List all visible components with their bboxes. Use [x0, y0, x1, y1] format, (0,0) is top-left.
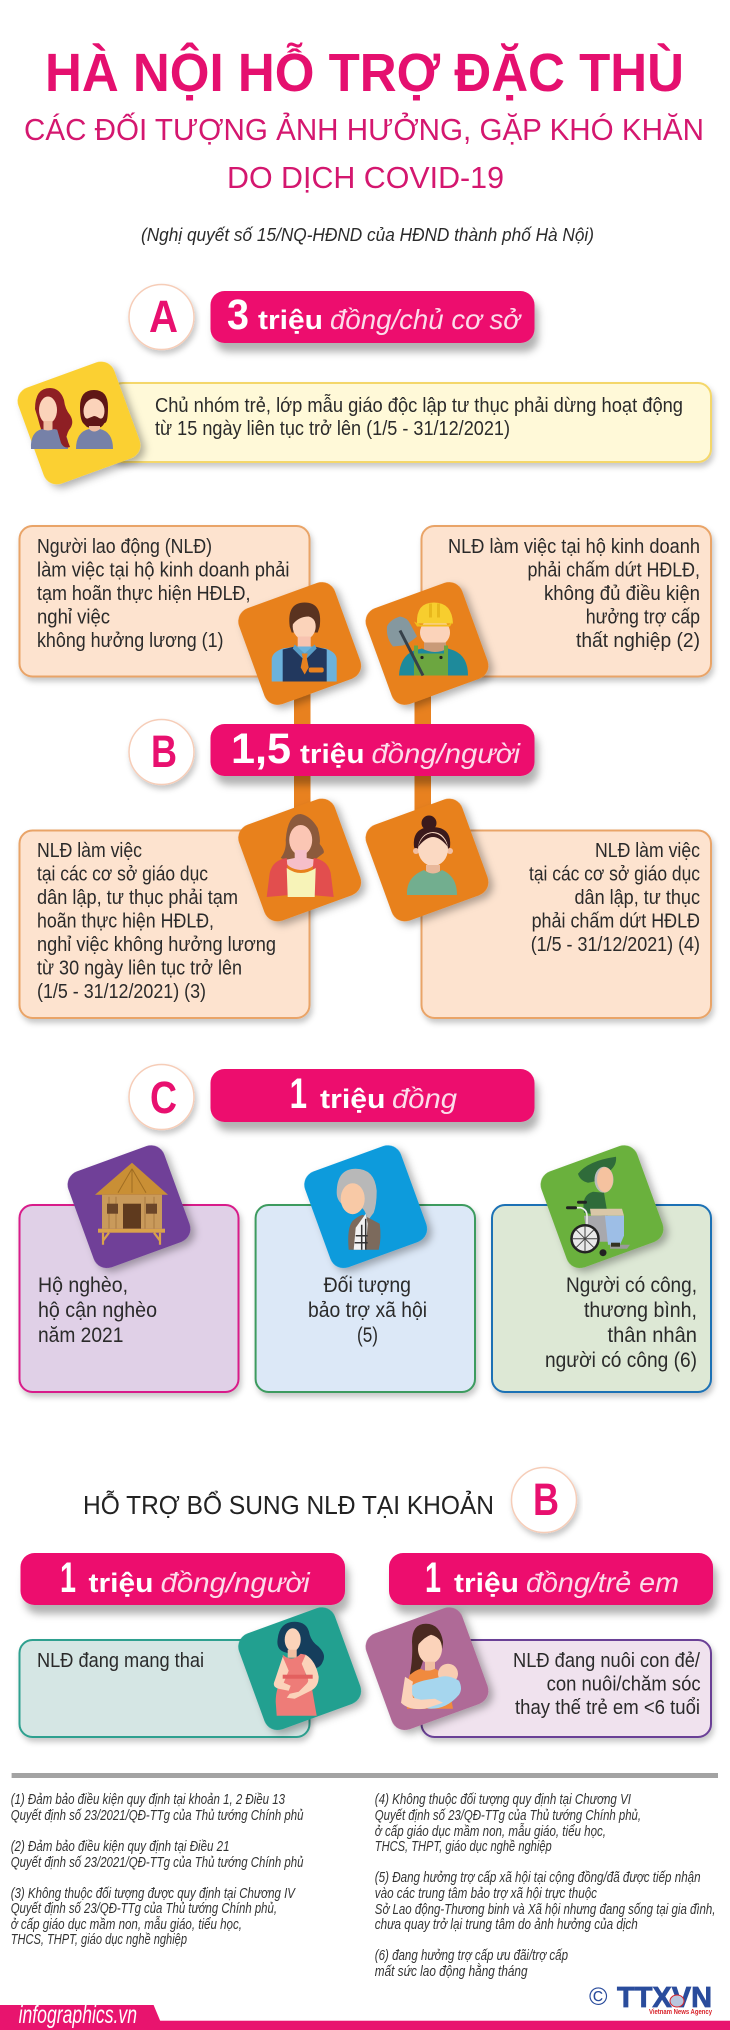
parents text: [513, 1650, 701, 1719]
badge B: [129, 720, 194, 784]
C2 text: bảo trợ xã hội: [308, 1299, 427, 1322]
footnotes left column: Quyết định số 23/QĐ-TTg của Thủ tướng Chính phủ,: [11, 1901, 277, 1917]
panel: B card 4: [422, 830, 711, 1018]
C3 text: Người có công,: [566, 1274, 697, 1297]
icon: couple: [14, 358, 144, 488]
panel: C card merit persons: [492, 1141, 711, 1392]
footnotes left column: ở cấp giáo dục mầm non, mẫu giáo, tiểu học,: [11, 1916, 242, 1933]
card 2 text: phải chấm dứt HĐLĐ,: [528, 560, 700, 582]
title line 2: CÁC ĐỐI TƯỢNG ẢNH HƯỞNG, GẶP KHÓ KHĂN: [24, 111, 704, 147]
C2 text: (5): [357, 1324, 378, 1347]
C3 text: [545, 1274, 697, 1372]
badge A: A: [149, 291, 178, 342]
card 3 text: nghỉ việc không hưởng lương: [37, 934, 276, 956]
title line 3: DO DỊCH COVID-19: [227, 160, 504, 195]
footnotes left column: (1) Đảm bảo điều kiện quy định tại khoản 1, 2 Điều 13: [11, 1792, 285, 1808]
amount pill B: [210, 724, 534, 776]
amount pill A: 3: [227, 291, 249, 339]
card 4 text: dân lập, tư thục: [574, 887, 700, 909]
card 4 text: (1/5 - 31/12/2021) (4): [531, 934, 700, 956]
card 3 text: tại các cơ sở giáo dục: [37, 864, 208, 886]
pregnant text: NLĐ đang mang thai: [37, 1650, 204, 1672]
badge B: B: [151, 726, 177, 777]
footnotes right column: (4) Không thuộc đối tượng quy định tại Chương VI: [375, 1792, 631, 1808]
icon: woman with bun: [362, 795, 492, 925]
amount pill: per child: đồng/trẻ em: [526, 1567, 679, 1598]
section C header: [129, 1064, 534, 1130]
panel: B card 1: [20, 526, 310, 676]
panel: C card poor households: [20, 1141, 238, 1392]
source note: (Nghị quyết số 15/NQ-HĐND của HĐND thành phố Hà Nội): [141, 225, 594, 245]
footnotes right column: THCS, THPT, giáo dục nghề nghiệp: [375, 1839, 552, 1855]
card 2 text: hưởng trợ cấp: [586, 606, 700, 628]
logo: TTXVN: ©: [589, 1983, 608, 2011]
amount pill: per person: đồng/người: [161, 1567, 310, 1598]
card 1 text: làm việc tại hộ kinh doanh phải: [37, 560, 290, 582]
badge C: C: [150, 1072, 177, 1123]
logo: TTXVN: Vietnam News Agency: [649, 2009, 712, 2016]
footer site name: infographics.vn: [19, 2001, 137, 2029]
footnotes left column: (3) Không thuộc đối tượng được quy định tại Chương IV: [11, 1886, 296, 1902]
card 1 text: tạm hoãn thực hiện HĐLĐ,: [37, 583, 250, 605]
parents text: con nuôi/chăm sóc: [547, 1674, 701, 1696]
divider rule: [12, 1773, 718, 1778]
A text: từ 15 ngày liên tục trở lên (1/5 - 31/12/2021): [155, 418, 510, 440]
heading text: HỖ TRỢ BỔ SUNG NLĐ TẠI KHOẢN: [83, 1490, 494, 1520]
C2 text: Đối tượng: [324, 1274, 411, 1297]
footnotes left column: Quyết định số 23/2021/QĐ-TTg của Thủ tướng Chính phủ: [11, 1855, 303, 1871]
footer bar: [0, 2001, 730, 2030]
icon: mother and baby: [362, 1603, 492, 1734]
section: extra support heading: [83, 1468, 576, 1532]
C1 text: [38, 1274, 157, 1347]
footnotes right column: Quyết định số 23/QĐ-TTg của Thủ tướng Chính phủ,: [375, 1808, 641, 1824]
amount pill A: đồng/chủ cơ sở: [330, 304, 522, 335]
amount pill A: [210, 291, 534, 343]
amount pill: per child: [389, 1553, 713, 1605]
footnotes left column: THCS, THPT, giáo dục nghề nghiệp: [11, 1932, 187, 1948]
amount pill C: 1: [290, 1070, 307, 1118]
card 2 text: thất nghiệp (2): [576, 630, 700, 652]
footnotes right column: (6) đang hưởng trợ cấp ưu đãi/trợ cấp: [375, 1948, 568, 1964]
amount pill: per person: 1: [60, 1554, 76, 1602]
card 1 text: nghỉ việc: [37, 606, 110, 628]
icon: elderly woman: [300, 1141, 431, 1272]
parents text: NLĐ đang nuôi con đẻ/: [513, 1650, 700, 1672]
panel: parents of young children: [362, 1603, 711, 1737]
section B header: [129, 720, 534, 784]
C1 text: năm 2021: [38, 1324, 123, 1347]
panel: B card 2: [422, 526, 711, 676]
card 1 text: [37, 536, 290, 652]
panel: C card social protection: [256, 1141, 475, 1392]
footnotes left column: [11, 1792, 303, 1948]
footnotes right column: chưa quay trở lại trung tâm do ảnh hưởng của dịch: [375, 1917, 638, 1933]
card 4 text: phải chấm dứt HĐLĐ: [532, 910, 700, 932]
amount pill: per person: [20, 1553, 345, 1605]
logo: TTXVN: TTXVN: [617, 1982, 712, 2014]
card 3 text: từ 30 ngày liên tục trở lên: [37, 958, 242, 980]
icon: woman in red cardigan: [234, 795, 365, 925]
footnotes right column: vào các trung tâm bảo trợ xã hội trực thuộc: [375, 1886, 598, 1902]
C3 text: thương bình,: [584, 1299, 697, 1322]
card 2 text: [448, 536, 700, 652]
panel: A description: [14, 358, 711, 488]
card 4 text: NLĐ làm việc: [595, 840, 700, 862]
A text: Chủ nhóm trẻ, lớp mẫu giáo độc lập tư thục phải dừng hoạt động: [155, 394, 683, 417]
footnotes left column: Quyết định số 23/2021/QĐ-TTg của Thủ tướng Chính phủ: [11, 1808, 303, 1824]
icon: office worker: [234, 578, 365, 709]
footnotes left column: (2) Đảm bảo điều kiện quy định tại Điều 21: [11, 1839, 230, 1855]
card 3 text: [37, 840, 276, 1003]
card 4 text: [529, 840, 700, 956]
footnotes right column: ở cấp giáo dục mầm non, mẫu giáo, tiểu học,: [375, 1823, 606, 1840]
badge B repeat: B: [533, 1474, 559, 1525]
A text: [155, 394, 683, 440]
badge B repeat: [512, 1468, 576, 1532]
C1 text: Hộ nghèo,: [38, 1274, 128, 1297]
amount pill C: [210, 1069, 534, 1122]
panel: B card 3: [20, 830, 310, 1018]
amount pill B: 1,5: [231, 725, 291, 773]
card 3 text: hoãn thực hiện HĐLĐ,: [37, 910, 214, 932]
amount pill C: triệu: [320, 1084, 386, 1114]
section A header: [129, 284, 534, 350]
title line 1: HÀ NỘI HỖ TRỢ ĐẶC THÙ: [45, 42, 684, 103]
card 4 text: tại các cơ sở giáo dục: [529, 864, 700, 886]
badge A: [129, 284, 194, 350]
C3 text: người có công (6): [545, 1349, 697, 1372]
badge C: [129, 1064, 194, 1130]
card 2 text: NLĐ làm việc tại hộ kinh doanh: [448, 536, 700, 558]
icon: pregnant woman: [234, 1603, 365, 1734]
panel: pregnant workers: [20, 1603, 365, 1737]
icon: construction worker: [362, 578, 492, 709]
card 3 text: dân lập, tư thục phải tạm: [37, 887, 238, 909]
title: [24, 42, 704, 195]
amount pill B: đồng/người: [372, 738, 521, 769]
C3 text: thân nhân: [608, 1324, 697, 1347]
icon: veteran in wheelchair: [537, 1141, 667, 1272]
card 1 text: không hưởng lương (1): [37, 630, 224, 652]
card 3 text: (1/5 - 31/12/2021) (3): [37, 981, 206, 1003]
card 1 text: Người lao động (NLĐ): [37, 536, 212, 558]
C2 text: [308, 1274, 427, 1347]
C1 text: hộ cận nghèo: [38, 1299, 157, 1322]
amount pill A: triệu: [258, 305, 323, 335]
icon: stilt house: [64, 1141, 194, 1272]
card 2 text: không đủ điều kiện: [544, 583, 700, 605]
amount pill B: triệu: [300, 739, 364, 769]
connector bars: [294, 690, 431, 835]
parents text: thay thế trẻ em <6 tuổi: [515, 1697, 700, 1719]
amount pill: per child: 1: [425, 1554, 441, 1602]
amount pill C: đồng: [392, 1083, 457, 1114]
card 3 text: NLĐ làm việc: [37, 840, 142, 862]
footnotes right column: [375, 1792, 716, 1980]
footnotes right column: mất sức lao động hằng tháng: [375, 1963, 528, 1980]
amount pill: per person: triệu: [88, 1568, 154, 1598]
amount pill: per child: triệu: [454, 1568, 519, 1598]
